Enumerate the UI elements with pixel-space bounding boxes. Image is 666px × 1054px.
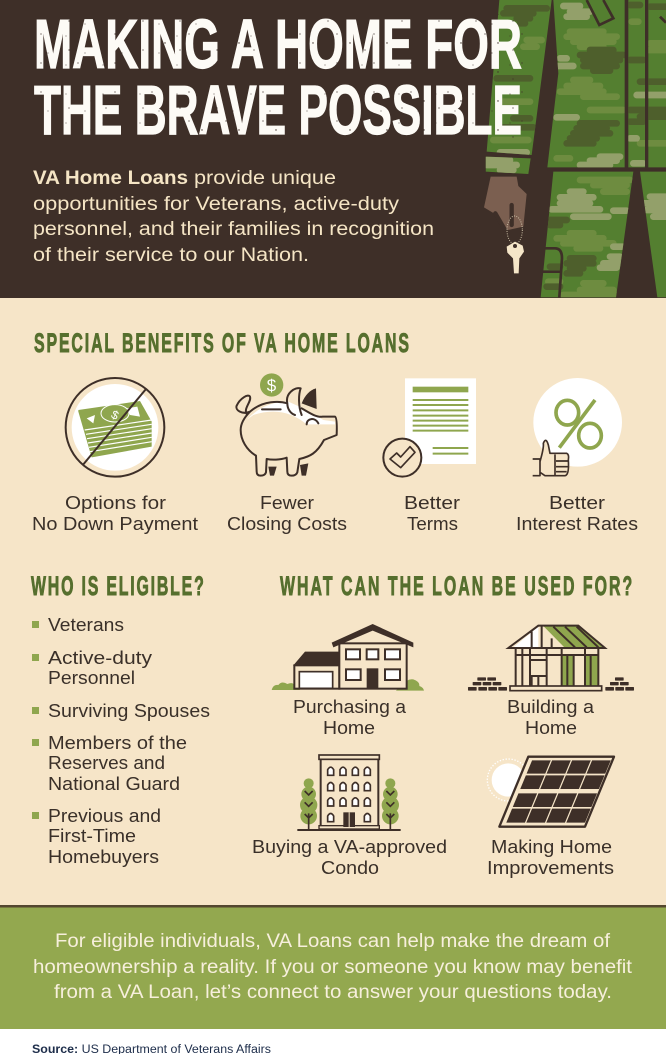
key	[507, 242, 524, 273]
label: closing costs: Closing Costs	[227, 514, 347, 534]
list bullets	[32, 621, 39, 819]
label: closing costs: Fewer	[260, 493, 314, 513]
heading: who is eligible: WHO IS ELIGIBLE?	[31, 571, 204, 601]
camouflage uniform	[470, 0, 666, 300]
label: buying a condo: Buying a VA-approved	[252, 837, 447, 857]
panel: call to action: For eligible individuals, VA Loans can help make the dream of	[55, 931, 611, 952]
label: building a home: Home	[525, 718, 577, 738]
icon: house	[272, 624, 424, 691]
label: building a home	[507, 697, 595, 738]
label: no down payment: Options for	[65, 493, 166, 513]
label: building a home: Building a	[507, 697, 595, 717]
label: no down payment: No Down Payment	[32, 514, 198, 534]
label: home improvements	[487, 837, 614, 878]
label: purchasing a home: Purchasing a	[293, 697, 407, 717]
intro paragraph: provide unique	[194, 168, 336, 189]
icon: house frame under construction	[468, 626, 634, 691]
eligibility list: Members of the	[48, 733, 187, 753]
label: interest rates	[516, 493, 638, 534]
panel: call to action: from a VA Loan, let’s connect to answer your questions today.	[54, 982, 612, 1003]
eligibility list: National Guard	[48, 774, 180, 794]
icon: solar panel and sun	[487, 757, 614, 827]
label: better terms: Better	[404, 493, 460, 513]
eligibility list	[32, 615, 210, 867]
intro paragraph: personnel, and their families in recognition	[33, 219, 434, 240]
label: buying a condo: Condo	[321, 858, 379, 878]
eligibility list: First-Time	[48, 826, 136, 846]
label: purchasing a home	[293, 697, 407, 738]
icon: interest rates	[533, 378, 622, 476]
icon: piggy bank	[236, 373, 337, 476]
intro paragraph: VA Home Loans	[33, 168, 188, 189]
key hole	[513, 244, 517, 248]
label: purchasing a home: Home	[323, 718, 375, 738]
soldier illustration	[470, 0, 666, 300]
label: no down payment	[32, 493, 198, 534]
money dollar sign: $	[109, 407, 121, 423]
panel: benefits background	[0, 298, 666, 906]
header panel background	[0, 0, 666, 298]
label: interest rates: Better	[549, 493, 605, 513]
icon: terms document	[383, 378, 476, 477]
intro paragraph: of their service to our Nation.	[33, 245, 309, 266]
heading: what can the loan be used for: WHAT CAN THE LOAN BE USED FOR?	[280, 571, 632, 601]
title distress texture	[30, 14, 525, 138]
coin dollar sign: $	[267, 376, 277, 395]
label: home improvements: Improvements	[487, 858, 614, 878]
intro paragraph	[33, 168, 434, 266]
title	[34, 5, 522, 149]
panel: call to action: homeownership a reality. If you or someone you know may benefit	[33, 957, 633, 978]
eligibility list: Personnel	[48, 668, 135, 688]
eligibility list: Previous and	[48, 806, 161, 826]
eligibility list: Homebuyers	[48, 847, 159, 867]
hand	[484, 177, 527, 231]
label: buying a condo	[252, 837, 447, 878]
uniform seams	[486, 0, 666, 297]
intro paragraph: opportunities for Veterans, active-duty	[33, 194, 400, 215]
label: closing costs	[227, 493, 347, 534]
eligibility list: Active-duty	[48, 648, 152, 668]
label: home improvements: Making Home	[491, 837, 612, 857]
heading: special benefits: SPECIAL BENEFITS OF VA HOME LOANS	[34, 328, 409, 358]
key ring	[507, 216, 522, 244]
label: interest rates: Interest Rates	[516, 514, 638, 534]
panel: call to action	[0, 905, 666, 1029]
label: better terms	[404, 493, 460, 534]
label: better terms: Terms	[407, 514, 458, 534]
icon: no down payment	[66, 378, 164, 477]
eligibility list: Surviving Spouses	[48, 701, 210, 721]
eligibility list: Reserves and	[48, 753, 165, 773]
eligibility list: Veterans	[48, 615, 124, 635]
icon: condo building	[297, 755, 401, 830]
